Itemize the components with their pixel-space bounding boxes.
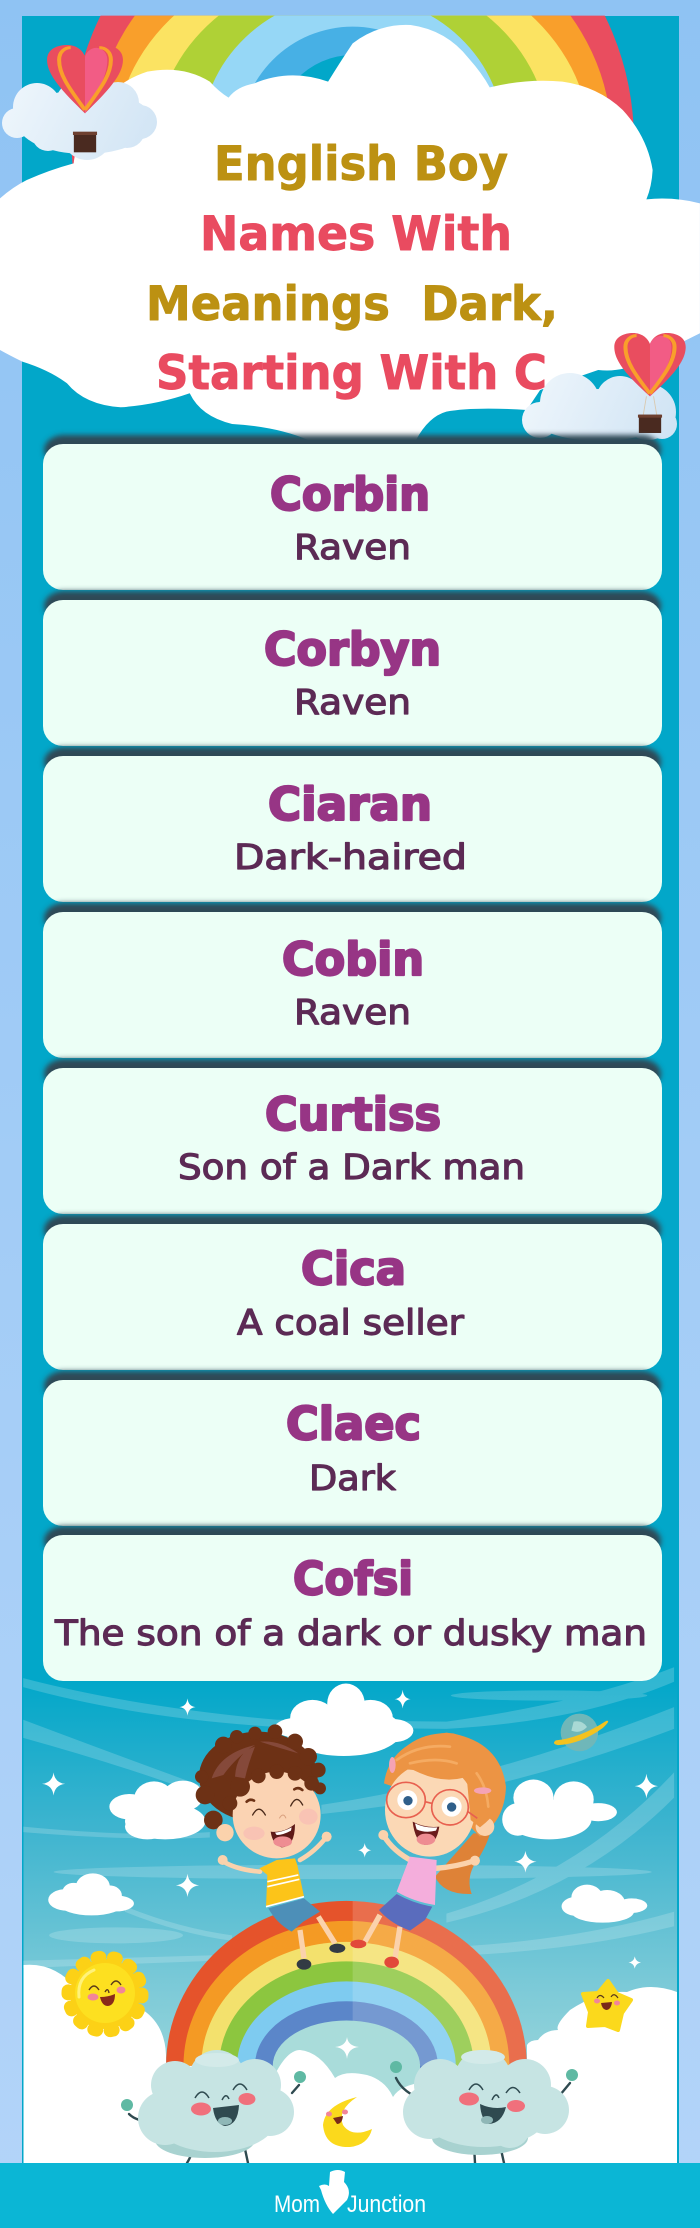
card: Cofsi: Cofsi bbox=[293, 1552, 413, 1606]
card: Corbyn bbox=[43, 591, 662, 746]
rainbow bbox=[166, 1901, 527, 2088]
card: Ciaran: Dark-haired bbox=[234, 838, 467, 878]
card: Corbin: Raven bbox=[294, 528, 411, 568]
planet bbox=[554, 1714, 608, 1751]
white cloud under the arch bbox=[270, 2050, 425, 2163]
card: Curtiss bbox=[43, 1059, 662, 1214]
hot air balloon left bbox=[47, 45, 123, 152]
title: English Boy bbox=[214, 137, 508, 192]
card: Cica bbox=[43, 1215, 662, 1370]
card: Cobin: Cobin bbox=[282, 933, 424, 986]
footer bar bbox=[0, 2163, 700, 2228]
sparkle under the arch bbox=[335, 2037, 359, 2059]
header illustration bbox=[0, 0, 700, 440]
star bbox=[583, 1981, 631, 2030]
smiling cloud right bbox=[390, 2050, 578, 2163]
card: Corbyn: Raven bbox=[294, 683, 411, 723]
title: Meanings Dark, bbox=[146, 277, 558, 332]
small cloud left bbox=[2, 80, 157, 160]
sun bbox=[68, 1957, 142, 2031]
card: Ciaran bbox=[43, 747, 662, 902]
card: Claec bbox=[43, 1371, 662, 1526]
card: Cica: Cica bbox=[301, 1242, 406, 1296]
card: Cobin: Raven bbox=[294, 993, 411, 1033]
card: Curtiss: Son of a Dark man bbox=[178, 1148, 525, 1188]
MomJunction logo: Junction bbox=[347, 2191, 426, 2218]
bottom sky details bbox=[23, 1667, 674, 1969]
MomJunction logo: Mom bbox=[274, 2191, 320, 2218]
card: Cofsi: The son of a dark or dusky man bbox=[54, 1614, 647, 1654]
sparkles bbox=[42, 1690, 658, 1969]
title: Names With bbox=[200, 207, 512, 262]
moon bbox=[323, 2097, 372, 2147]
smiling cloud left bbox=[121, 2050, 306, 2163]
logo mark bbox=[319, 2170, 349, 2214]
card: Corbin: Corbin bbox=[270, 468, 430, 521]
hot air balloon right bbox=[614, 333, 686, 433]
card: Corbyn: Corbyn bbox=[264, 623, 441, 676]
rainbow arc bbox=[72, 16, 634, 164]
puffy white clouds bbox=[48, 1684, 647, 1923]
girl bbox=[350, 1733, 506, 1968]
card: Corbin bbox=[43, 435, 662, 590]
card: Claec: Claec bbox=[286, 1398, 421, 1450]
MomJunction logo bbox=[274, 2170, 426, 2218]
title bbox=[146, 137, 558, 401]
bottom sky panel bbox=[24, 1681, 677, 2164]
small cloud right bbox=[522, 373, 677, 441]
card: Cica: A coal seller bbox=[237, 1304, 465, 1344]
large white cloud bbox=[0, 25, 700, 440]
card: Ciaran: Ciaran bbox=[268, 778, 432, 831]
sky streaks bbox=[23, 1667, 674, 1968]
card: Claec: Dark bbox=[309, 1459, 397, 1499]
card: Curtiss: Curtiss bbox=[265, 1088, 441, 1141]
card: Cobin bbox=[43, 903, 662, 1058]
card: Cofsi bbox=[43, 1526, 662, 1681]
boy bbox=[195, 1724, 345, 1970]
title: Starting With C bbox=[156, 346, 547, 401]
white ground clouds bbox=[24, 1965, 677, 2163]
